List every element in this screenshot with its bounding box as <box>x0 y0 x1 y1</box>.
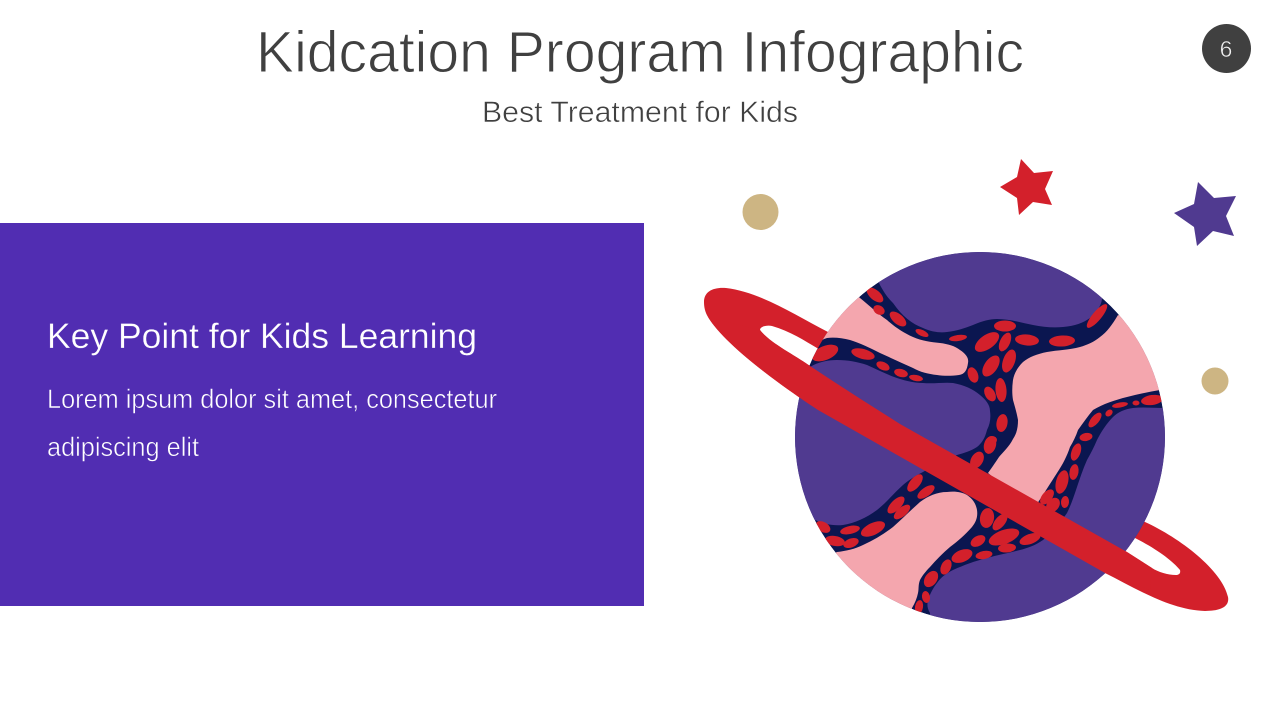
icon: tan dot large <box>742 194 778 230</box>
lower-right purple region <box>927 408 1165 622</box>
upper-left pink region <box>822 297 968 376</box>
icon: tan dot small <box>1202 368 1228 394</box>
panel body text: Lorem ipsum dolor sit amet, consectetur <box>47 384 497 414</box>
left purple region <box>780 360 990 525</box>
red cells <box>809 285 1164 615</box>
ring front <box>708 317 1152 590</box>
title: Kidcation Program Infographic <box>256 20 1024 85</box>
page number badge <box>1202 24 1251 73</box>
top purple region <box>878 252 1102 332</box>
panel body text <box>47 384 497 462</box>
ring back <box>704 288 1228 611</box>
planet body <box>795 252 1165 622</box>
panel heading: Key Point for Kids Learning <box>47 317 477 356</box>
subtitle: Best Treatment for Kids <box>482 96 798 129</box>
panel body text: adipiscing elit <box>47 432 199 462</box>
page number badge: 6 <box>1220 36 1232 62</box>
right pink region <box>988 315 1159 502</box>
planet illustration <box>704 230 1228 640</box>
icon: red star <box>1000 159 1053 215</box>
panel: key point <box>0 223 644 606</box>
lower pink region <box>836 492 978 609</box>
icon: purple star <box>1174 182 1236 246</box>
